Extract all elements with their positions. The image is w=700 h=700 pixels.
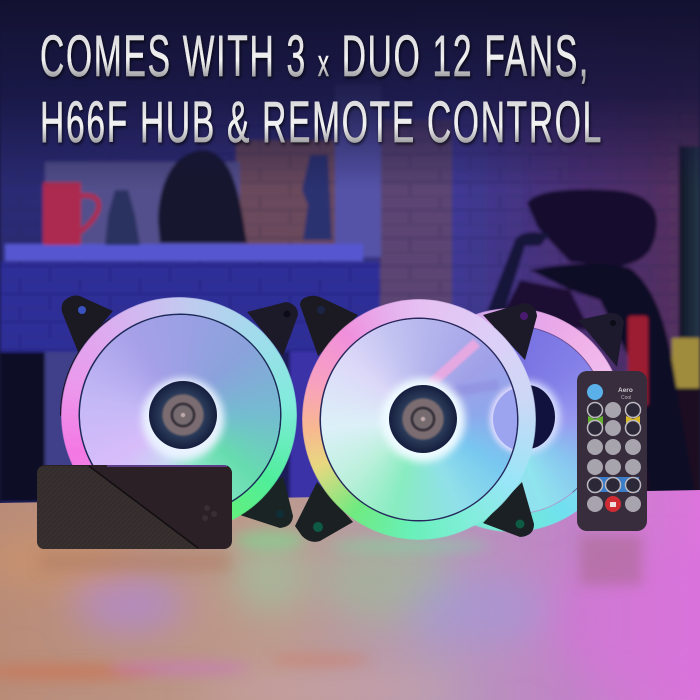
- centre fan RGB ring: [302, 299, 536, 540]
- rear fan frame corner: [578, 313, 624, 367]
- fan: rear (third) fan: [474, 308, 624, 532]
- remote control: Cool: [621, 395, 631, 401]
- power button: [587, 384, 603, 400]
- left fan frame corners: [60, 296, 298, 528]
- colour bands: [588, 416, 603, 425]
- left fan hub glow: [142, 378, 224, 460]
- centre fan blades: [321, 319, 517, 520]
- rear fan hub glow: [494, 381, 560, 453]
- chair: [487, 189, 695, 495]
- blade highlight: pink streak: [426, 339, 480, 389]
- gold brick patch: [672, 338, 700, 388]
- rear fan ring: [474, 308, 612, 532]
- remote control: [577, 371, 647, 531]
- standing figure: [302, 155, 332, 240]
- fan: centre fan: [295, 296, 537, 542]
- left fan RGB ring: [61, 297, 297, 533]
- lower dark area: [0, 352, 48, 502]
- centre fan frame corners: [295, 296, 537, 542]
- left fan blades: [80, 315, 280, 515]
- table top: [0, 485, 700, 700]
- mug: [43, 182, 99, 245]
- warm brick behind shelf: [236, 140, 336, 245]
- warm brick pillar: [380, 120, 452, 360]
- monitor: [679, 146, 700, 341]
- left fan hub: [149, 381, 217, 449]
- H66F hub box: [37, 465, 232, 549]
- title: [40, 24, 603, 155]
- under-shelf wall: [0, 262, 380, 354]
- helmet figurine: [158, 150, 247, 243]
- hub logo: [202, 505, 217, 521]
- fan: left fan: [60, 296, 298, 528]
- rear fan blades: [418, 326, 606, 514]
- shelf back panel: [45, 162, 240, 246]
- shelf frame: [335, 85, 381, 257]
- diagonal facet: [37, 466, 198, 549]
- figurine: [105, 190, 140, 245]
- dim top overlay: [0, 0, 700, 190]
- buttons: [588, 402, 640, 492]
- centre fan hub: [389, 385, 457, 453]
- rear fan seen through blades: [493, 387, 553, 451]
- brand logo: Aero: [618, 387, 633, 394]
- blade highlight: blue band: [429, 380, 499, 400]
- centre fan hub glow: [381, 378, 465, 462]
- rear fan hub: [499, 385, 555, 449]
